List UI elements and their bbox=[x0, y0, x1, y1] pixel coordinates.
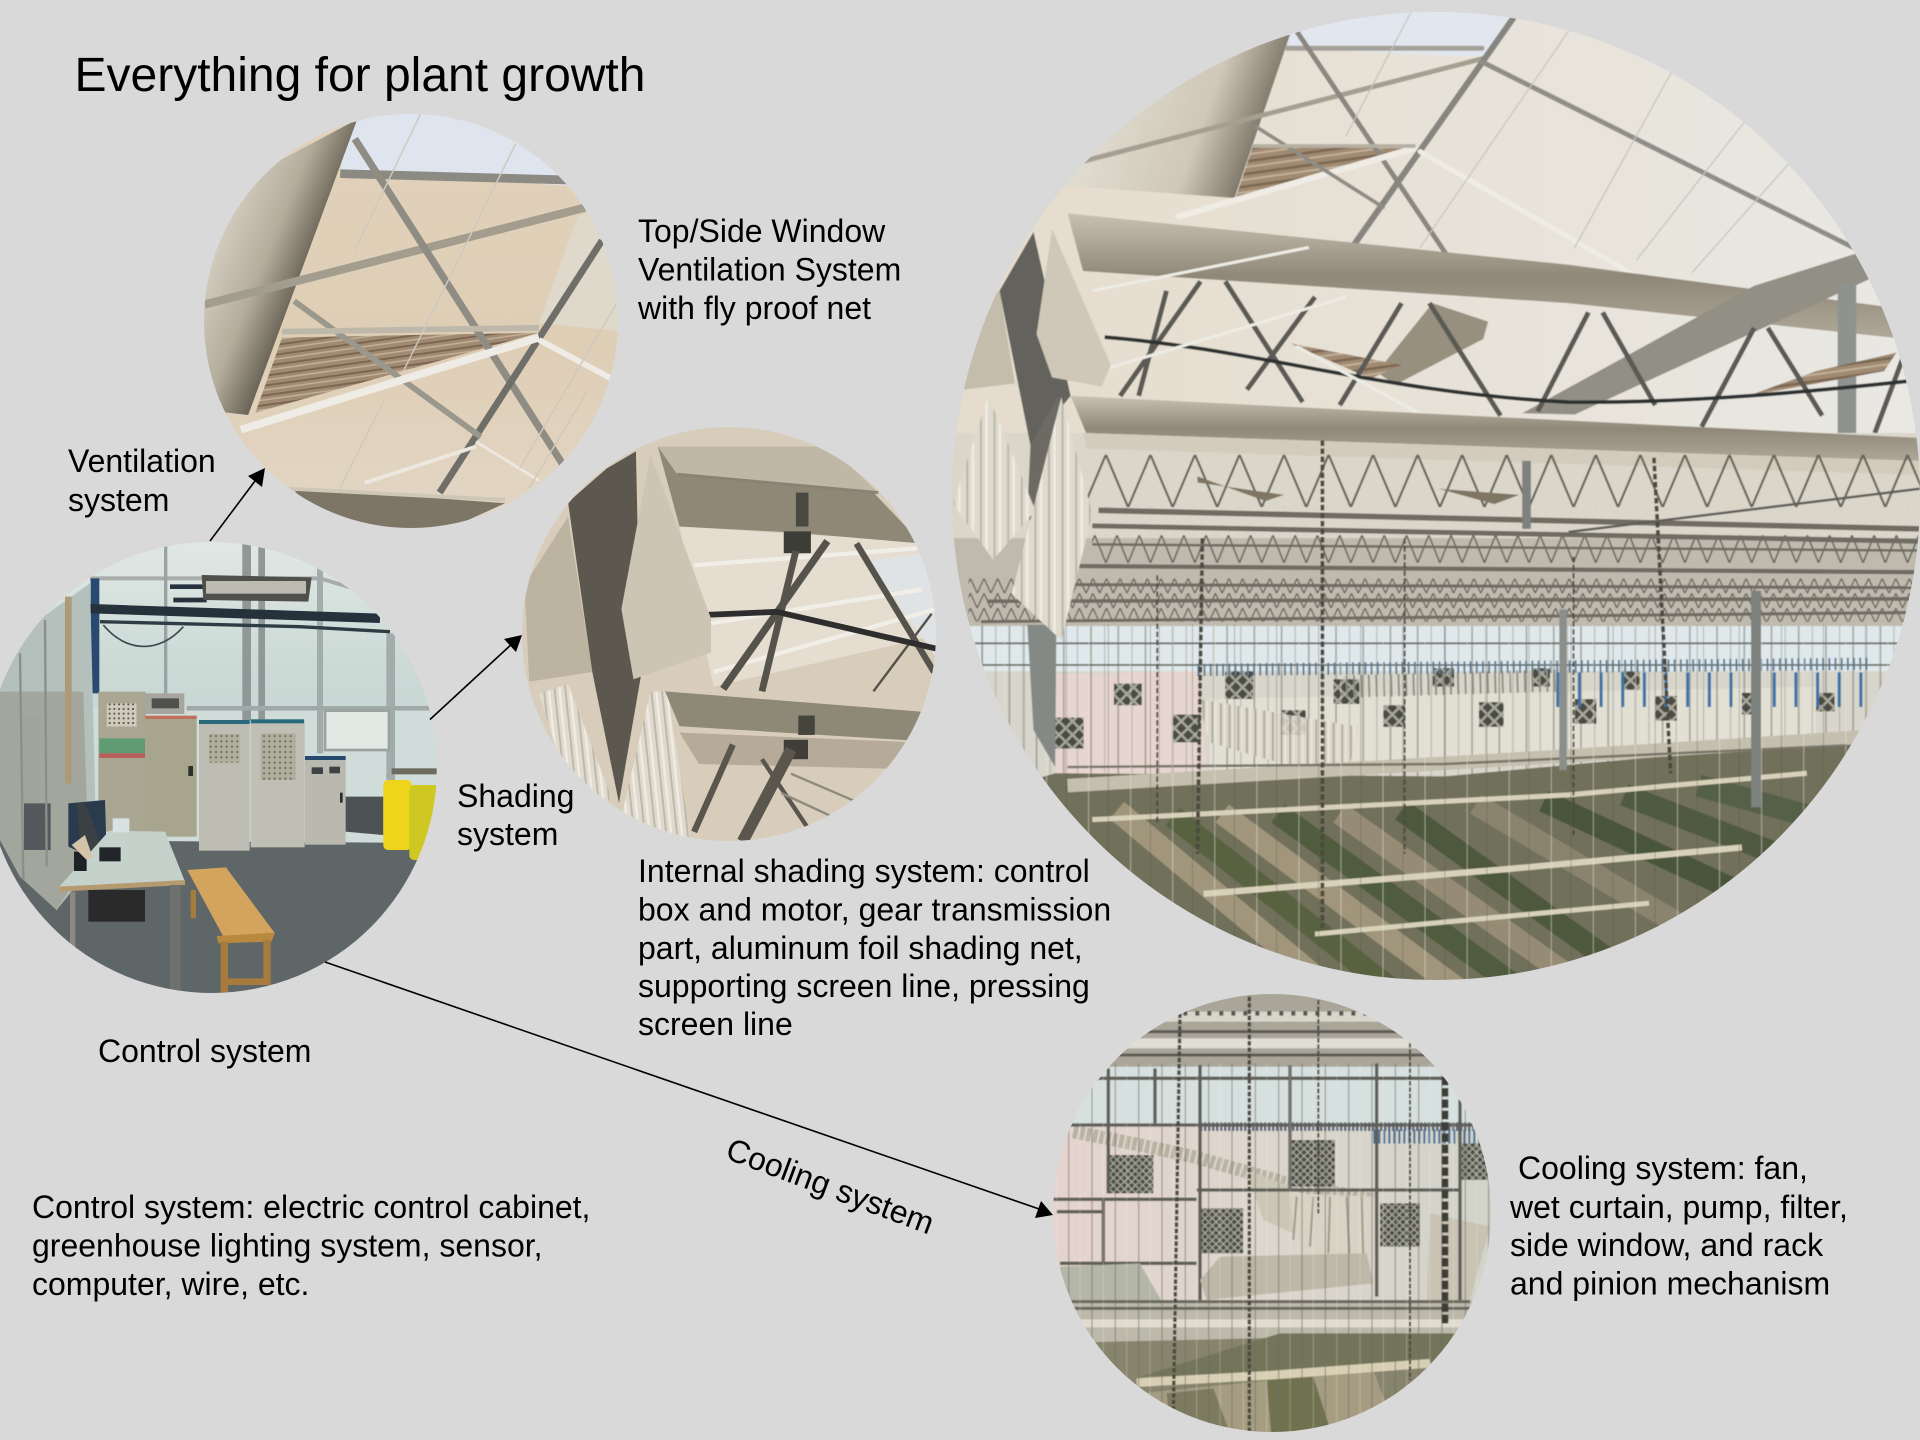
text: top and side window ventilation: with fly proof net bbox=[637, 290, 871, 326]
photo: ventilation system bbox=[204, 114, 618, 528]
text: internal shading system: screen line bbox=[638, 1006, 793, 1042]
text: top and side window ventilation: Top/Side Window bbox=[638, 213, 885, 249]
text: cooling system description: side window, and rack bbox=[1510, 1227, 1824, 1263]
text: internal shading system: supporting screen line, pressing bbox=[638, 968, 1090, 1004]
text: internal shading system: Internal shading system: control bbox=[638, 853, 1090, 889]
text: control system description: greenhouse lighting system, sensor, bbox=[32, 1228, 543, 1264]
arrow: control to shading bbox=[430, 635, 522, 720]
photo: cooling system bbox=[1053, 994, 1491, 1432]
label: ventilation system: Ventilation bbox=[68, 443, 216, 479]
label: shading system: system bbox=[457, 816, 558, 852]
text: cooling system description: Cooling system: fan, bbox=[1518, 1150, 1808, 1186]
label: ventilation system: system bbox=[68, 482, 169, 518]
label: control system: Control system bbox=[98, 1033, 311, 1069]
label: cooling system on arrow: Cooling system bbox=[722, 1131, 939, 1241]
text: internal shading system: part, aluminum foil shading net, bbox=[638, 930, 1083, 966]
arrow: control to ventilation bbox=[210, 468, 265, 541]
arrow: control to cooling bbox=[325, 962, 1053, 1218]
photo: control room bbox=[0, 542, 437, 993]
text: control system description: Control system: electric control cabinet, bbox=[32, 1189, 590, 1225]
title: Everything for plant growth bbox=[74, 49, 645, 102]
text: cooling system description: and pinion mechanism bbox=[1510, 1266, 1830, 1302]
text: control system description: computer, wire, etc. bbox=[32, 1266, 309, 1302]
photo: shading system bbox=[522, 427, 936, 841]
photo: greenhouse overview bbox=[950, 0, 1920, 1002]
text: internal shading system: box and motor, gear transmission bbox=[638, 892, 1111, 928]
label: shading system: Shading bbox=[457, 778, 574, 814]
text: top and side window ventilation: Ventilation System bbox=[638, 252, 901, 288]
text: cooling system description: wet curtain, pump, filter, bbox=[1509, 1189, 1848, 1225]
